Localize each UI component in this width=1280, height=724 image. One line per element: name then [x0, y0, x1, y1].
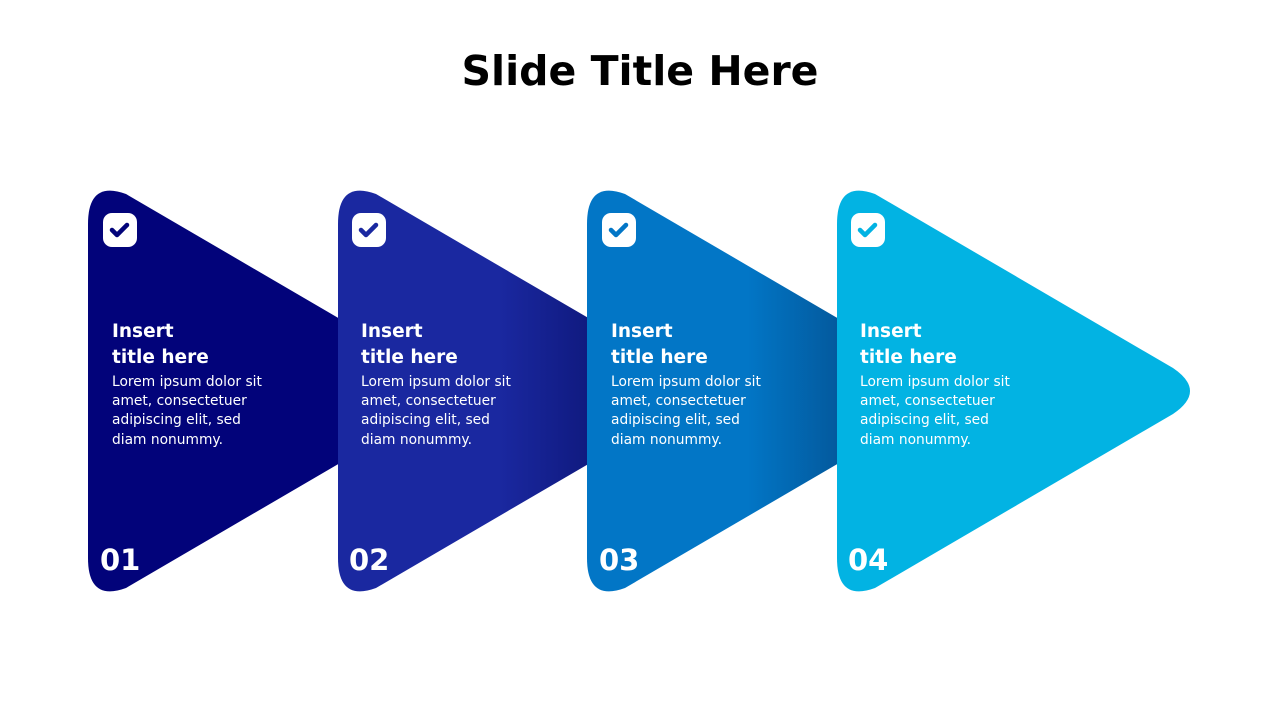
text 1: Lorem ipsum dolor sit	[112, 374, 262, 390]
text 1: diam nonummy.	[112, 432, 223, 448]
text 2: title here	[361, 347, 458, 368]
text 4: Lorem ipsum dolor sit	[860, 374, 1010, 390]
text 1: title here	[112, 347, 209, 368]
text 1: adipiscing elit, sed	[112, 412, 241, 428]
text 3: Insert	[611, 321, 673, 342]
text 4: title here	[860, 347, 957, 368]
icon: check	[851, 213, 885, 247]
step 1	[88, 191, 441, 591]
text 3: Lorem ipsum dolor sit	[611, 374, 761, 390]
number 03: 03	[599, 543, 639, 577]
text 1	[112, 321, 262, 448]
step 3	[587, 191, 940, 591]
text 2: Insert	[361, 321, 423, 342]
text 4: Insert	[860, 321, 922, 342]
icon: check	[602, 213, 636, 247]
step 2	[338, 191, 691, 591]
text 3: diam nonummy.	[611, 432, 722, 448]
number 04: 04	[848, 543, 888, 577]
text 1: amet, consectetuer	[112, 393, 247, 409]
title: Slide Title Here	[462, 47, 818, 95]
text 3: adipiscing elit, sed	[611, 412, 740, 428]
text 3: title here	[611, 347, 708, 368]
text 3	[611, 321, 761, 448]
text 4: diam nonummy.	[860, 432, 971, 448]
text 2: amet, consectetuer	[361, 393, 496, 409]
text 4	[860, 321, 1010, 448]
icon: check	[103, 213, 137, 247]
icon: check	[352, 213, 386, 247]
text 2	[361, 321, 511, 448]
text 4: adipiscing elit, sed	[860, 412, 989, 428]
text 3: amet, consectetuer	[611, 393, 746, 409]
number 02: 02	[349, 543, 389, 577]
text 2: diam nonummy.	[361, 432, 472, 448]
text 2: adipiscing elit, sed	[361, 412, 490, 428]
number 01: 01	[100, 543, 140, 577]
step 4	[837, 191, 1190, 591]
text 2: Lorem ipsum dolor sit	[361, 374, 511, 390]
text 4: amet, consectetuer	[860, 393, 995, 409]
text 1: Insert	[112, 321, 174, 342]
